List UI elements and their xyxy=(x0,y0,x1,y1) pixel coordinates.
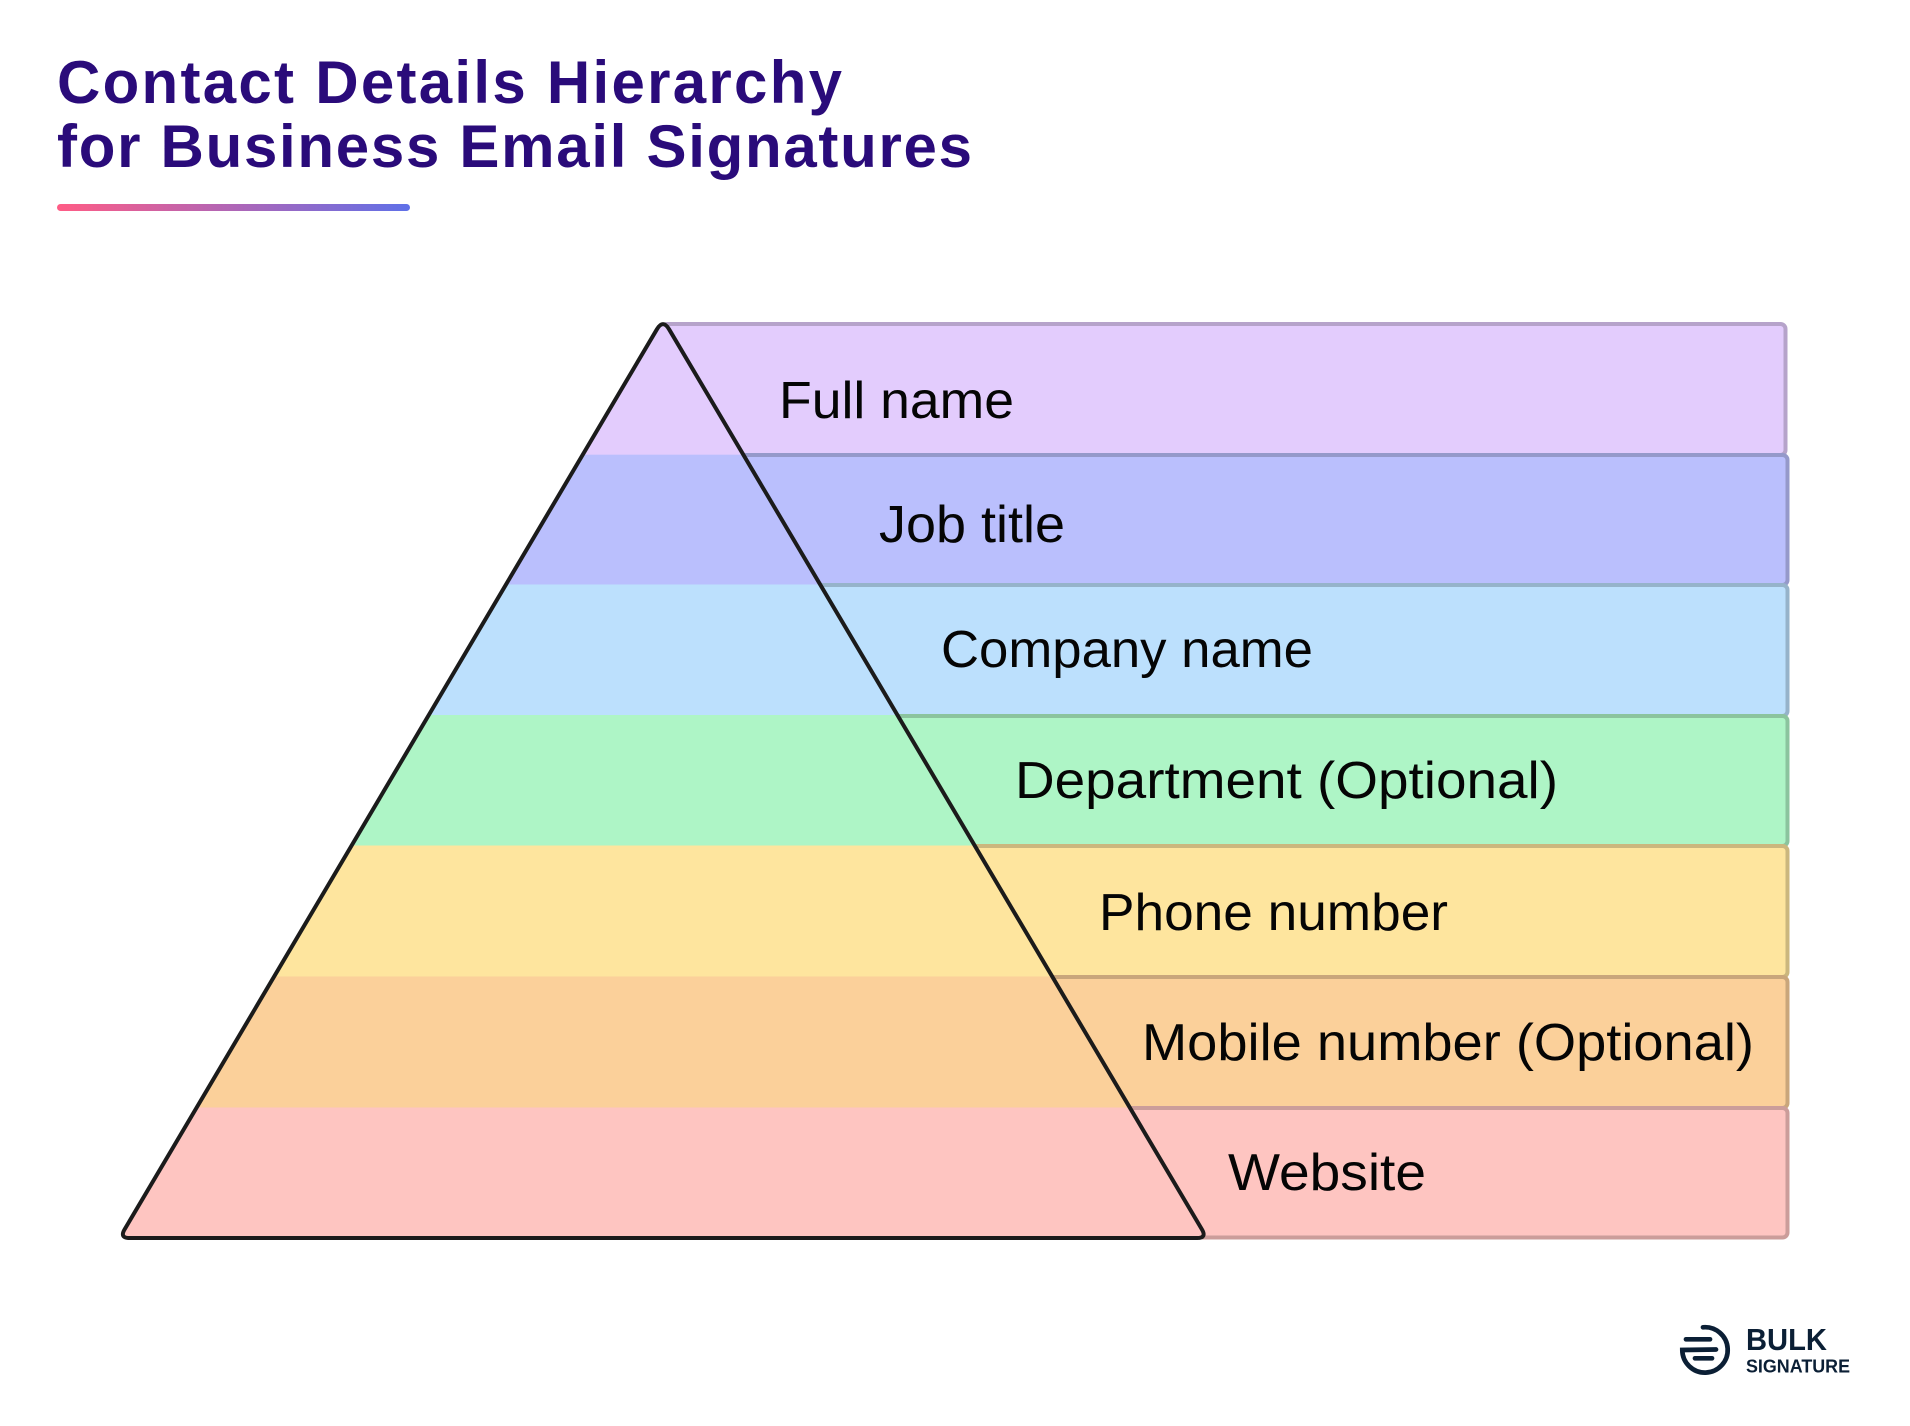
panel: Website xyxy=(662,1108,1788,1238)
panel: Mobile number xyxy=(662,977,1788,1108)
label: Website: Website xyxy=(1228,1144,1426,1202)
label: Phone number: Phone number xyxy=(1099,884,1448,942)
label: Mobile number (Optional): Mobile number (Optional) xyxy=(1142,1014,1754,1072)
label: Department (Optional): Department (Optional) xyxy=(1015,752,1558,810)
title xyxy=(57,49,972,180)
title: for Business Email Signatures xyxy=(57,113,972,180)
logo text: BULK: BULK xyxy=(1746,1322,1828,1357)
panel: Full name xyxy=(662,324,1786,455)
logo: Bulk Signature xyxy=(1682,1322,1850,1377)
logo text: SIGNATURE: SIGNATURE xyxy=(1746,1356,1850,1377)
label: Job title: Job title xyxy=(879,496,1065,554)
panel: Job title xyxy=(662,455,1788,585)
title: Contact Details Hierarchy xyxy=(57,49,843,116)
panel: Company name xyxy=(662,585,1788,716)
label: Company name: Company name xyxy=(941,621,1313,679)
pyramid xyxy=(100,315,1220,1242)
icon: logo mark xyxy=(1682,1327,1728,1373)
panel: Department xyxy=(662,716,1788,846)
label: Full name: Full name xyxy=(779,372,1014,430)
panel: Phone number xyxy=(662,846,1788,977)
title underline xyxy=(57,204,410,211)
